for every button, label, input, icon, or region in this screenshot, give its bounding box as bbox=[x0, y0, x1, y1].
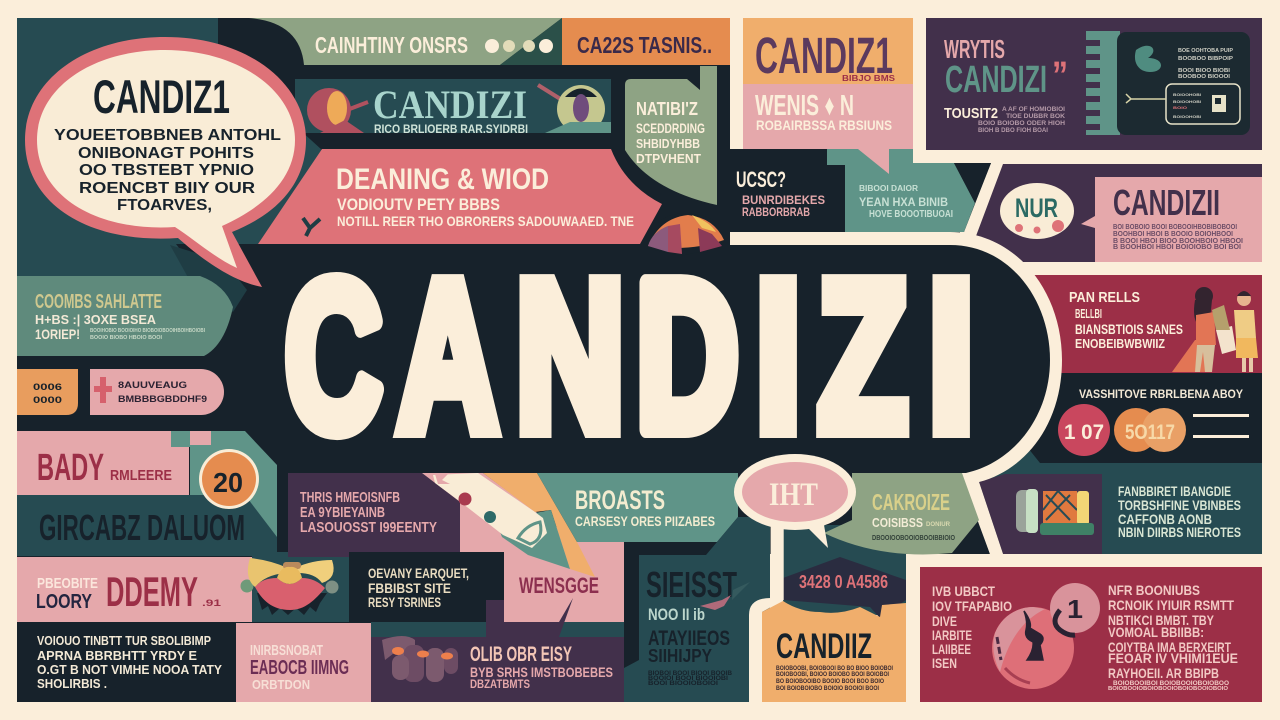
panel: purple wrytis card: TOUSIT2 bbox=[944, 105, 998, 122]
right list: NBTIKCI BMBT. TBY bbox=[1108, 612, 1215, 628]
panel: crimson pan reells: BIANSBTIOIS SANES bbox=[1075, 321, 1183, 337]
right list: BOIOBOOIOBOIOBOOIOBOIOBOOIOBOIO bbox=[1108, 686, 1228, 692]
right list: FEOAR IV VHIMI1EUE bbox=[1108, 650, 1238, 666]
bubble body: OO TBSTEBT YPNIO bbox=[79, 162, 254, 179]
panel: small orange tag: 0000 bbox=[33, 395, 62, 405]
panel: small orange tag: 0006 bbox=[33, 382, 62, 392]
panel: light orange candizi bbox=[743, 18, 913, 84]
nur caption: B BOOI HBOI BIOO BOOHBOIO HBOOI bbox=[1113, 238, 1243, 245]
icon: three mauve figures bbox=[382, 636, 458, 682]
nur bubble bbox=[1000, 183, 1074, 239]
panel: low left sage: H+BS :| 3OXE BSEA bbox=[35, 312, 157, 327]
panel: pink wensgge with pen bbox=[422, 473, 640, 622]
panel: pink pill with cross: BMBBBGBDDHF9 bbox=[118, 394, 207, 404]
nur title: CANDIZII bbox=[1113, 182, 1220, 223]
panel: teal box with text: HOVE BOOOTIBUOAI bbox=[869, 209, 953, 220]
panel: teal candizi banner bbox=[295, 79, 611, 136]
quote mark: ” bbox=[1052, 55, 1068, 97]
bubble body: FTOARVES, bbox=[117, 197, 212, 214]
panel: teal sieisst block: BOOI BIOOIOBOIOI bbox=[648, 681, 718, 687]
panel: bottom pink block: EABOCB IIMNG bbox=[250, 657, 349, 679]
arrow bbox=[1126, 94, 1166, 103]
panel: teal box with text: YEAN HXA BINIB bbox=[859, 195, 948, 209]
panel: small orange tag bbox=[17, 369, 78, 415]
panel: pink preogite row: PBEOBITE bbox=[37, 575, 98, 592]
panel: pink wenis callout: ROBAIRBSSA RBSIUNS bbox=[756, 117, 892, 133]
stat circle red: 1 07 bbox=[1064, 421, 1104, 444]
nur bubble: NUR bbox=[1015, 193, 1058, 223]
panel: teal sieisst block: BOOIOI BOOI BIOOIOBI bbox=[648, 676, 728, 682]
panel: low left sage: BOOIHOBIO BOOIOIHO BIOBOIOBOOIHBOIHBOIOBI bbox=[90, 328, 206, 334]
icon: row of dots bbox=[485, 39, 553, 53]
nur caption bbox=[1113, 224, 1243, 251]
outlined qr box: BOIOOHOBI bbox=[1173, 92, 1201, 97]
panel: teal box with text: BIBOOI DAIOR bbox=[859, 184, 918, 193]
panel: broasts banner bbox=[575, 473, 738, 542]
panel: pink wensgge with pen: WENSGGE bbox=[519, 573, 599, 598]
panel: pink preogite row bbox=[17, 557, 252, 622]
panel: sage side callout bbox=[625, 66, 717, 205]
body text: VODIOUTV PETY BBBS bbox=[337, 195, 500, 214]
icon: gadget bbox=[1016, 489, 1094, 535]
bubble heading: CANDIZ1 bbox=[93, 70, 230, 123]
panel: teal sieisst block: ATAYIIEOS bbox=[648, 627, 730, 650]
icon: pen bbox=[433, 473, 570, 569]
oval callout iht bbox=[734, 454, 856, 548]
bubble body: ONIBONAGT POHITS bbox=[78, 145, 254, 162]
stat circle red bbox=[1058, 404, 1110, 456]
outlined qr box: BOIO bbox=[1173, 105, 1187, 110]
panel: crimson pan reells: PAN RELLS bbox=[1069, 289, 1140, 306]
dark inner card: BOOBOO BIOOOI bbox=[1178, 74, 1231, 80]
panel: dark uscs box: RABBORBRAB bbox=[742, 205, 810, 219]
heading: DEANING & WIOD bbox=[336, 163, 549, 196]
panel: light orange candiiz card: BOIOBOOBI, BOIOBOOI BO BO BIOO BOIOBOI bbox=[776, 666, 893, 672]
panel: teal gadget list bbox=[979, 448, 1262, 554]
dark inner card: BOOBOO BIBPOIP bbox=[1178, 56, 1234, 62]
panel: central dark pill bbox=[262, 245, 1050, 473]
nur caption: BOOHBOI HBOI B BOOIO BOIOHBOOI bbox=[1113, 231, 1233, 238]
left list: ISEN bbox=[932, 655, 957, 671]
nur caption: BOI BOBOIO BOOI BOBOOIHBOBIBOBOOI bbox=[1113, 224, 1237, 231]
icon: left fruit bbox=[307, 88, 368, 133]
panel: teal gadget list: CAFFONB AONB bbox=[1118, 511, 1212, 527]
panel: purple wrytis card: CANDIZI bbox=[945, 59, 1047, 101]
main title bbox=[285, 237, 974, 474]
panel: crimson bottom right bbox=[920, 567, 1262, 702]
badge 20 bbox=[199, 449, 259, 509]
panel: purple wrytis card: WRYTIS bbox=[944, 34, 1005, 64]
panel: bottom pink block bbox=[236, 623, 371, 702]
outlined qr box: BOIOOHOBI bbox=[1173, 114, 1201, 119]
panel: bottom pink block: ORBTDON bbox=[252, 677, 310, 692]
panel: teal sieisst block bbox=[624, 517, 770, 702]
panel: low left sage: COOMBS SAHLATTE bbox=[35, 291, 162, 313]
panel: sage carrotz shape: DBOOIOOBOOIOBOOIBBIOIO bbox=[872, 535, 955, 542]
panel: teal behind orange card bbox=[783, 525, 906, 618]
panel: light orange candiiz card: BOI BOIOBOIOBO BOIOIO BOOIOI BOOI bbox=[776, 686, 879, 692]
panel: light orange candizi: BIBJO BMS bbox=[842, 74, 896, 83]
panel: dark stats band bbox=[1030, 373, 1262, 465]
nur caption: B BOOHBOI HBOI BOIOIOBO BOI BOI bbox=[1113, 244, 1241, 251]
panel: dark uscs box: UCSC? bbox=[736, 167, 786, 192]
stat circles orange: 5O117 bbox=[1125, 421, 1175, 444]
panel: crimson pan reells: BELLBI bbox=[1075, 306, 1102, 321]
panel: sage carrotz shape: CAKROIZE bbox=[872, 489, 950, 515]
panel: sage side callout: SHBIDYHBB bbox=[636, 136, 700, 151]
right list: BOIOBOOIBOI BOIOBOOIOBOIOBOO bbox=[1113, 681, 1229, 687]
panel: dark text box: RESY TSRINES bbox=[368, 594, 441, 610]
panel: sage banner bbox=[249, 18, 562, 65]
left list: IVB UBBCT bbox=[932, 583, 995, 599]
icon: dome hat bbox=[646, 213, 728, 256]
body text bbox=[337, 195, 634, 229]
icon: right fruit bbox=[538, 85, 611, 133]
icon: overlapping circles with figure bbox=[992, 583, 1100, 689]
right list: RCNOIK IYIUIR RSMTT bbox=[1108, 597, 1234, 613]
main title: I bbox=[756, 237, 801, 474]
panel: dark stats band: VASSHITOVE RBRLBENA ABOY bbox=[1079, 387, 1243, 401]
right list: VOMOAL BBIIBB: bbox=[1108, 624, 1204, 640]
dark inner card: BOOI BIOO BIOBI bbox=[1178, 68, 1231, 74]
panel: purple text block: LASOUOSST I99EENTY bbox=[300, 519, 437, 536]
panel: crimson pan reells bbox=[1030, 275, 1262, 373]
small caption bbox=[978, 107, 1066, 134]
panel: pink pill with cross: 8AUUVEAUG bbox=[118, 380, 187, 390]
panel: teal gadget list: FANBBIRET IBANGDIE bbox=[1118, 483, 1231, 499]
badge 20: 20 bbox=[213, 467, 243, 498]
panel: bottom dark notes: VOIOUO TINBTT TUR SBOLIBIMP bbox=[37, 633, 211, 648]
panel: light orange candiiz card: BOIOBOOBI, BOIOO BOIOBO BOOI BOIOBOI bbox=[776, 672, 889, 678]
panel: teal sieisst block: NOO II ib bbox=[648, 605, 705, 624]
dark inner card bbox=[1117, 32, 1250, 135]
small caption: BOIO BOIOBO ODER HIOH bbox=[978, 121, 1065, 127]
small caption: TIOE DUBBR BOK bbox=[1006, 114, 1066, 120]
panel: lower dark teal strip bbox=[371, 622, 624, 642]
panel: teal box with bow character bbox=[240, 550, 349, 622]
right list bbox=[1108, 582, 1238, 692]
panel: bottom purple block: OLIB OBR EISY bbox=[470, 643, 572, 666]
panel: sage carrotz shape: COISIBSS bbox=[872, 515, 923, 530]
panel: low left sage bbox=[17, 276, 233, 356]
panel: broasts banner: CARSESY ORES PIIZABES bbox=[575, 513, 715, 529]
panel: sage side callout: DTPVHENT bbox=[636, 151, 701, 166]
panel: low left sage: BOOIO BIOBO HBOIO BOOI bbox=[90, 335, 163, 341]
small caption: A AF OF HOMIOBIOI bbox=[1002, 107, 1065, 113]
panel: bottom dark notes: APRNA BBRBHTT YRDY E bbox=[37, 648, 197, 663]
panel: pink preogite row: .91 bbox=[202, 598, 221, 608]
bubble body: ROENCBT BIIY OUR bbox=[79, 180, 255, 197]
panel: crimson pan reells: ENOBEIBWBWIIZ bbox=[1075, 336, 1165, 351]
panel: pink wenis callout: WENIS ♦ N bbox=[755, 90, 854, 122]
panel: bottom purple block: BYB SRHS IMSTBOBEBES bbox=[470, 664, 613, 680]
panel: dark text box bbox=[349, 552, 504, 622]
panel: orange tag bbox=[562, 18, 730, 65]
bubble body bbox=[54, 127, 281, 214]
main title: A bbox=[398, 237, 498, 474]
panel: bottom purple block bbox=[371, 598, 624, 702]
icon: cross bbox=[94, 377, 112, 403]
panel: teal behind orange card: 3428 0 A4586 bbox=[799, 572, 888, 592]
panel: teal sieisst block: BIOBOI BOOI BIOOI BOOIB bbox=[648, 671, 733, 677]
panel: sage carrotz shape bbox=[824, 473, 979, 554]
panel: bottom dark notes: O.GT B NOT VIMHE NOOA TATY bbox=[37, 662, 222, 677]
connector: cream frame around orange card bbox=[749, 520, 784, 702]
panel: orange tag: CA22S TASNIS.. bbox=[577, 32, 712, 58]
panel: light orange candizi: CANDIZ1 bbox=[755, 27, 893, 84]
panel: sage side callout: NATIBI'Z bbox=[636, 99, 698, 119]
panel: coral deaning block bbox=[258, 149, 662, 244]
icon: bow character bbox=[240, 558, 338, 615]
main title: I bbox=[928, 237, 974, 474]
panel: light orange candiiz card: BO BOIOBOOIBO BOOIO BOOI BOO BOIO bbox=[776, 679, 884, 685]
main title: C bbox=[285, 237, 382, 474]
panel: teal sieisst block: SIIHIJPY bbox=[648, 646, 712, 666]
left list: IARBITE bbox=[932, 627, 972, 643]
icon: overlapping circles with figure: 1 bbox=[1067, 594, 1083, 624]
panel: bottom purple block: DBZATBMTS bbox=[470, 677, 530, 691]
dark inner card: BOE OOHTOBA PUIP bbox=[1178, 48, 1234, 54]
banner title: CANDIZI bbox=[373, 82, 527, 127]
panel: purple text block: EA 9YBIEYAINB bbox=[300, 504, 385, 521]
panel: pink preogite row: DDEMY bbox=[106, 568, 198, 615]
panel: bady block: BADY bbox=[37, 447, 104, 489]
left list: IOV TFAPABIO bbox=[932, 598, 1012, 614]
panel: purple text block bbox=[288, 473, 460, 552]
left list bbox=[932, 583, 1012, 671]
left list: DIVE bbox=[932, 613, 957, 629]
stat circles orange bbox=[1114, 408, 1186, 452]
bubble body: YOUEETOBBNEB ANTOHL bbox=[54, 127, 281, 144]
panel: top left teal background bbox=[17, 18, 322, 276]
panel: teal gadget list: NBIN DIIRBS NIEROTES bbox=[1118, 524, 1241, 540]
panel: purple nur card bbox=[976, 164, 1262, 262]
panel: purple text block: THRIS HMEOISNFB bbox=[300, 489, 400, 506]
panel: dark text box: OEVANY EARQUET, bbox=[368, 565, 469, 581]
outlined qr box bbox=[1166, 84, 1240, 124]
panel: sage side callout: SCEDDRDING bbox=[636, 120, 705, 136]
panel: bady block bbox=[17, 431, 277, 556]
panel: teal sieisst block: SIEISST bbox=[646, 564, 737, 605]
oval callout iht: IHT bbox=[769, 477, 818, 513]
main title: D bbox=[636, 237, 739, 474]
panel: teal gadget list: TORBSHFINE VBINBES bbox=[1118, 497, 1241, 513]
icon: small bird bbox=[700, 595, 731, 610]
left list: LAIIBEE bbox=[932, 641, 971, 657]
comb strip bbox=[1086, 31, 1120, 135]
panel: purple wrytis card bbox=[926, 18, 1262, 150]
panel: pink pill with cross bbox=[90, 369, 224, 415]
panel: dark text box: FBBIBST SITE bbox=[368, 580, 451, 596]
panel: bady block: RMLEERE bbox=[110, 467, 172, 484]
right list: RAYHOEII. AR BBIPB bbox=[1108, 665, 1219, 681]
banner caption: RICO BRLIOERB RAR.SYIDRBI bbox=[374, 122, 528, 136]
small caption: BIOH B DBO FIOH BOAI bbox=[978, 128, 1048, 134]
panel: dark uscs box: BUNRDIBEKES bbox=[742, 193, 825, 207]
panel: pink preogite row: LOORY bbox=[36, 591, 93, 613]
panel: pink wenis callout bbox=[743, 84, 913, 174]
main title: N bbox=[516, 237, 624, 474]
people illustration bbox=[1172, 287, 1258, 372]
banner heading: CAINHTINY ONSRS bbox=[315, 32, 468, 58]
panel: bottom dark notes bbox=[17, 623, 236, 702]
panel: speech bubble intro bbox=[25, 37, 306, 287]
panel: bottom dark notes: SHOLIRBIS . bbox=[37, 676, 107, 691]
right list: COIYTBA IMA BERXEIRT bbox=[1108, 639, 1231, 655]
panel: low left sage: 1ORIEP! bbox=[35, 326, 80, 342]
outlined qr box: BOIOOHOBI bbox=[1173, 99, 1201, 104]
main title: Z bbox=[818, 237, 907, 474]
panel: sage carrotz shape: DONIUR bbox=[926, 522, 951, 528]
icon: small sprout bbox=[303, 218, 320, 236]
panel: broasts banner: BROASTS bbox=[575, 485, 665, 515]
panel: bady block: GIRCABZ DALUOM bbox=[39, 507, 245, 548]
right list: NFR BOONIUBS bbox=[1108, 582, 1200, 598]
panel: dark uscs box bbox=[730, 149, 845, 232]
panel: bottom pink block: INIRBSNOBAT bbox=[250, 642, 323, 659]
panel: light orange candiiz card: CANDIIZ bbox=[776, 627, 872, 666]
panel: teal box with text bbox=[827, 149, 991, 232]
body text: NOTILL REER THO OBRORERS SADOUWAAED. TNE bbox=[337, 213, 634, 229]
panel: light orange candiiz card bbox=[762, 601, 906, 702]
